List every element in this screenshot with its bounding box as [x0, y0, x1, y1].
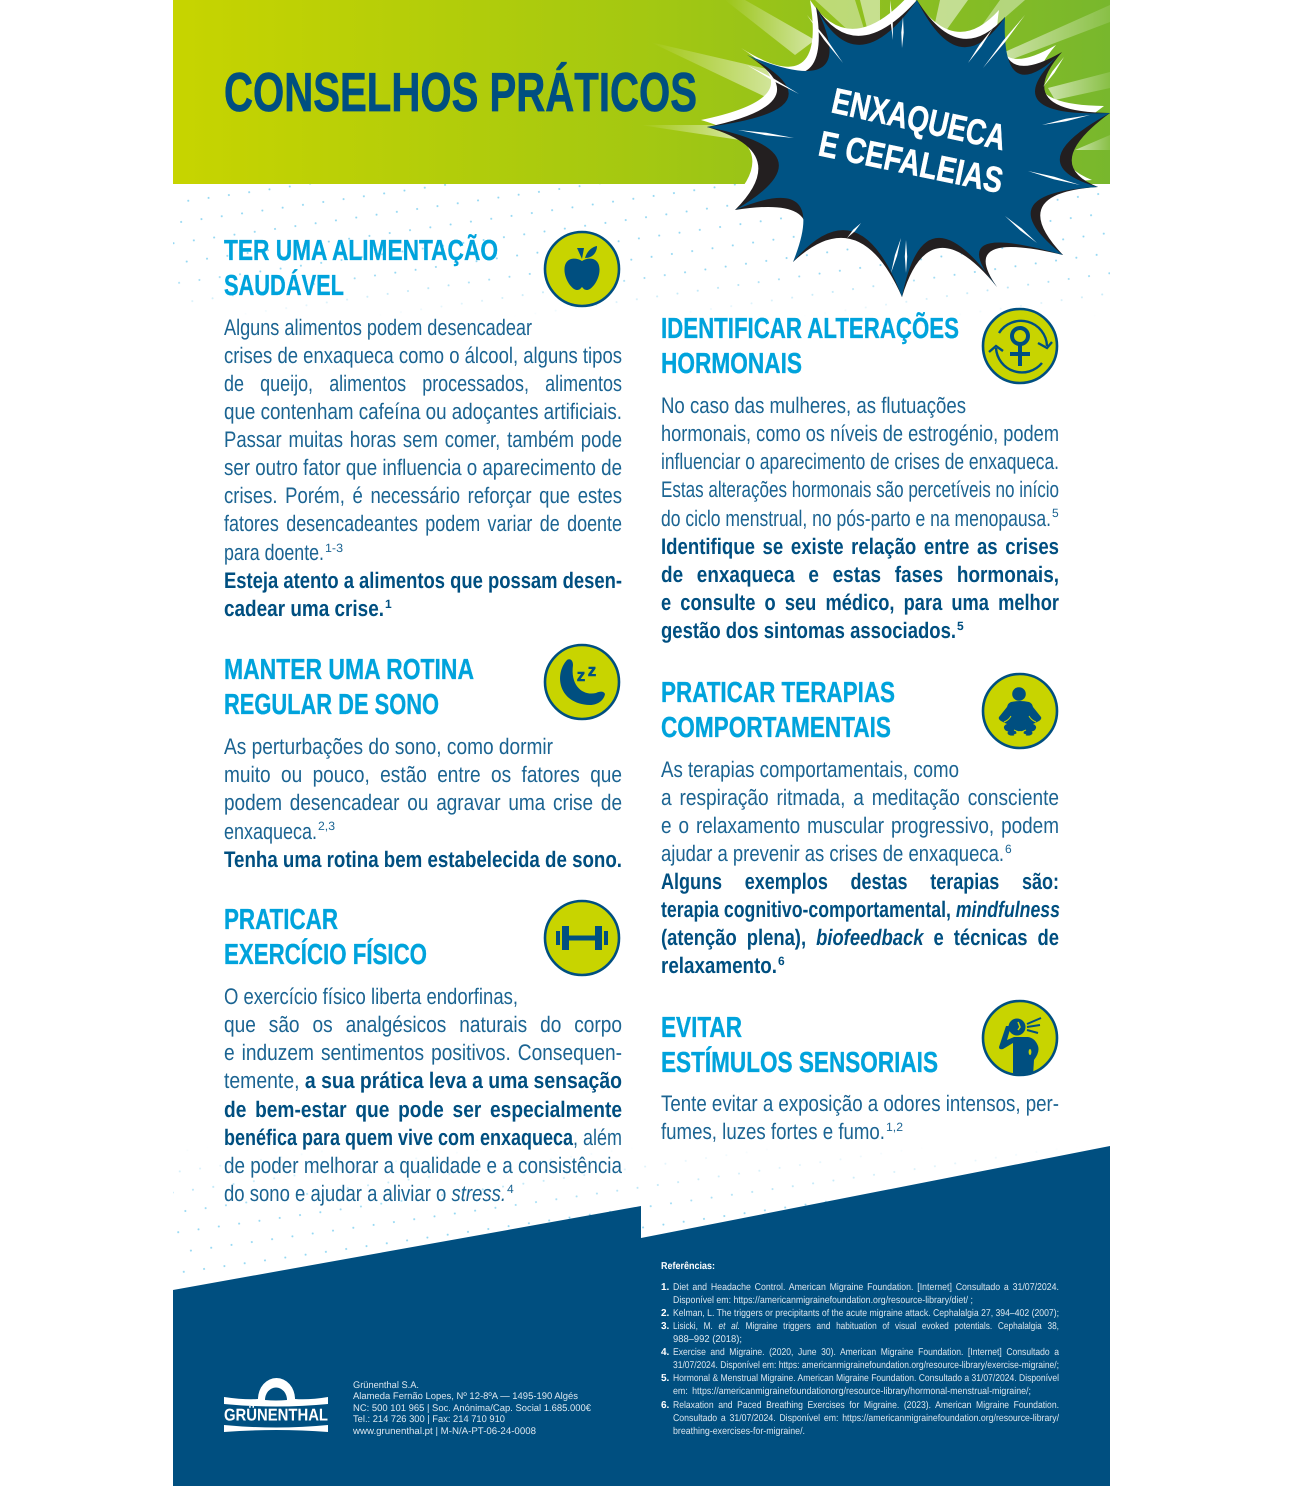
header banner — [173, 0, 1110, 184]
body text: sono: As perturbações do sono, como dormir — [224, 734, 553, 759]
title: CONSELHOS PRÁTICOS — [224, 61, 697, 123]
company address: NC: 500 101 965 | Soc. Anónima/Cap. Social 1.685.000€ — [353, 1403, 592, 1414]
company address: www.grunenthal.pt | M-N/A-PT-06-24-0008 — [352, 1426, 536, 1437]
body text: exercício: que são os analgésicos naturais do corpo — [224, 1012, 622, 1037]
body text: hormonais: hormonais, como os níveis de estrogénio, podem — [661, 421, 1059, 446]
heading: terapias: PRATICAR TERAPIAS — [661, 677, 895, 709]
body text: exercício: temente, a sua prática leva a uma sensação — [224, 1068, 622, 1093]
panel: terapias comportamentais — [661, 674, 1060, 978]
references: Exercise and Migraine. (2020, June 30). American Migraine Foundation. [Internet] Consultado a — [673, 1347, 1059, 1358]
badge text: ENXAQUECA — [828, 80, 1010, 158]
heading: exercício: PRATICAR — [224, 904, 338, 936]
body text: alimentação: ser outro fator que influencia o aparecimento de — [224, 455, 622, 480]
body text: estímulos: fumes, luzes fortes e fumo. — [661, 1119, 885, 1144]
icon: apple — [545, 232, 619, 306]
body text: hormonais: gestão dos sintomas associados. — [661, 618, 956, 643]
heading: terapias — [661, 677, 895, 744]
references: Consultado a 31/07/2024. Disponível em: https://americanmigrainefoundation.org/resource-library/ — [673, 1413, 1059, 1424]
references: 31/07/2024. Disponível em: https: americanmigrainefoundation.org/resource-library/exercise-migraine/; — [673, 1360, 1059, 1371]
company address: Tel.: 214 726 300 | Fax: 214 710 910 — [353, 1414, 505, 1425]
body text: terapias: As terapias comportamentais, como — [661, 757, 959, 782]
heading: estímulos: ESTÍMULOS SENSORIAIS — [661, 1046, 938, 1079]
heading: hormonais: HORMONAIS — [661, 348, 802, 380]
heading: exercício — [224, 904, 427, 971]
references: Disponível em: https://americanmigrainefoundation.org/resource-library/diet/ ; — [673, 1295, 973, 1306]
body text: alimentação: 1-3 — [325, 541, 343, 555]
references: em: https://americanmigrainefoundationorg/resource-library/hormonal-menstrual-migraine/; — [673, 1386, 1031, 1397]
heading: hormonais — [661, 312, 959, 380]
heading: terapias: COMPORTAMENTAIS — [661, 712, 891, 744]
body text: estímulos: Tente evitar a exposição a odores intensos, per- — [661, 1091, 1059, 1116]
body text: hormonais: 5 — [957, 619, 964, 633]
references: Referências: — [661, 1261, 715, 1272]
body text: estímulos: 1,2 — [886, 1120, 903, 1134]
heading: sono: MANTER UMA ROTINA — [224, 654, 474, 686]
icon: meditation — [983, 674, 1057, 748]
badge text — [818, 88, 1002, 192]
body text: terapias: 6 — [778, 954, 785, 968]
body text: hormonais: Identifique se existe relação entre as crises — [661, 534, 1059, 559]
body text: hormonais: 5 — [1052, 506, 1059, 520]
body text: sono: muito ou pouco, estão entre os fatores que — [224, 762, 622, 787]
references — [661, 1261, 1059, 1437]
icon: female symbol with cycle arrows — [983, 309, 1057, 383]
body text: alimentação: de queijo, alimentos processados, alimentos — [224, 371, 622, 396]
references: 988–992 (2018); — [673, 1334, 742, 1345]
panel: rotina de sono — [224, 645, 622, 872]
icon: person with headache — [983, 1001, 1057, 1076]
body text: terapias: Alguns exemplos destas terapias são: — [661, 869, 1059, 894]
icon: moon: z — [588, 661, 596, 680]
heading: exercício: EXERCÍCIO FÍSICO — [224, 938, 427, 971]
references: 3. — [661, 1321, 670, 1332]
references: 2. — [661, 1308, 670, 1319]
body text: alimentação: fatores desencadeantes podem variar de doente — [224, 511, 622, 536]
heading: hormonais: IDENTIFICAR ALTERAÇÕES — [661, 312, 959, 345]
body text: terapias: a respiração ritmada, a meditação consciente — [661, 785, 1059, 810]
panel: exercício físico — [224, 901, 622, 1206]
heading: estímulos: EVITAR — [661, 1012, 742, 1044]
logo: Grünenthal: GRÜNENTHAL — [224, 1406, 328, 1424]
body text: alimentação: para doente. — [224, 540, 324, 565]
body text: alimentação: crises. Porém, é necessário reforçar que estes — [224, 483, 622, 508]
body text: exercício: O exercício físico liberta endorfinas, — [224, 984, 518, 1009]
body text: hormonais: No caso das mulheres, as flutuações — [661, 393, 966, 418]
body text: alimentação: cadear uma crise. — [224, 596, 384, 621]
references: Diet and Headache Control. American Migraine Foundation. [Internet] Consultado a 31/07/2024. — [673, 1282, 1059, 1293]
body text: terapias: relaxamento. — [661, 953, 777, 978]
logo: Grünenthal — [224, 1378, 328, 1432]
heading: estímulos — [661, 1012, 938, 1079]
company address — [352, 1380, 592, 1437]
body text: alimentação: Alguns alimentos podem desencadear — [224, 315, 532, 340]
body text: terapias: e o relaxamento muscular progressivo, podem — [661, 813, 1059, 838]
heading: sono: REGULAR DE SONO — [224, 689, 439, 721]
company address: Grünenthal S.A. — [353, 1380, 419, 1391]
heading: alimentação — [224, 234, 498, 302]
company address: Alameda Fernão Lopes, Nº 12-8ºA — 1495-190 Algés — [353, 1391, 578, 1402]
body text: sono — [224, 734, 622, 872]
body text: exercício — [224, 984, 622, 1206]
heading: sono — [224, 654, 474, 721]
starburst badge — [701, 0, 1110, 297]
body text: terapias: ajudar a prevenir as crises de enxaqueca. — [661, 841, 1004, 866]
references: 4. — [661, 1347, 670, 1358]
references: Relaxation and Paced Breathing Exercises for Migraine. (2023). American Migraine Foundation. — [673, 1400, 1059, 1411]
body text: alimentação: 1 — [385, 597, 392, 611]
heading: alimentação: SAUDÁVEL — [224, 269, 344, 302]
body text: exercício: de poder melhorar a qualidade e a consistência — [224, 1153, 622, 1178]
badge text: E CEFALEIAS — [815, 123, 1007, 201]
body text: sono: 2,3 — [318, 819, 335, 833]
body text: exercício: e induzem sentimentos positivos. Consequen- — [224, 1040, 622, 1065]
footer panel — [173, 1146, 1110, 1486]
body text: terapias: (atenção plena), biofeedback e técnicas de — [661, 925, 1059, 950]
body text: sono: enxaqueca. — [224, 819, 317, 844]
body text: sono: podem desencadear ou agravar uma crise de — [224, 790, 622, 815]
heading: alimentação: TER UMA ALIMENTAÇÃO — [224, 234, 498, 267]
body text: exercício: de bem-estar que pode ser especialmente — [224, 1097, 622, 1122]
icon: moon: z — [577, 666, 585, 685]
references: 5. — [661, 1373, 670, 1384]
body text: hormonais: de enxaqueca e estas fases hormonais, — [661, 562, 1059, 587]
body text: hormonais — [661, 393, 1059, 643]
references: 6. — [661, 1400, 670, 1411]
body text: terapias: terapia cognitivo-comportamental, mindfulness — [661, 897, 1060, 922]
panel: alterações hormonais — [661, 309, 1059, 643]
background dot pattern — [173, 184, 1110, 1290]
body text: hormonais: e consulte o seu médico, para uma melhor — [661, 590, 1059, 615]
body text: alimentação: Passar muitas horas sem comer, também pode — [224, 427, 622, 452]
body text: terapias — [661, 757, 1060, 978]
body text: sono: Tenha uma rotina bem estabelecida de sono. — [224, 847, 622, 872]
body text: exercício: do sono e ajudar a aliviar o stress. — [224, 1181, 506, 1206]
body text: alimentação — [224, 315, 622, 621]
references: Lisicki, M. et al. Migraine triggers and habituation of visual evoked potentials. Cephalalgia 38, — [673, 1321, 1059, 1332]
body text: hormonais: Estas alterações hormonais são percetíveis no início — [661, 477, 1059, 502]
references: 1. — [661, 1282, 670, 1293]
icon: moon — [545, 645, 619, 719]
panel: alimentação saudável — [224, 232, 622, 621]
body text: exercício: 4 — [507, 1182, 514, 1196]
body text: alimentação: que contenham cafeína ou adoçantes artificiais. — [224, 399, 622, 424]
panel: estímulos sensoriais — [661, 1001, 1059, 1144]
body text: terapias: 6 — [1005, 842, 1012, 856]
body text: hormonais: influenciar o aparecimento de crises de enxaqueca. — [661, 449, 1059, 474]
body text: hormonais: do ciclo menstrual, no pós-parto e na menopausa. — [661, 506, 1051, 531]
references: Hormonal & Menstrual Migraine. American Migraine Foundation. Consultado a 31/07/2024. Disponível — [673, 1373, 1059, 1384]
body text: alimentação: Esteja atento a alimentos que possam desen- — [224, 568, 622, 593]
body text: estímulos — [661, 1091, 1059, 1144]
references: Kelman, L. The triggers or precipitants of the acute migraine attack. Cephalalgia 27, 394–402 (2007); — [673, 1308, 1059, 1319]
body text: alimentação: crises de enxaqueca como o álcool, alguns tipos — [224, 343, 622, 368]
body text: exercício: benéfica para quem vive com enxaqueca, além — [224, 1125, 622, 1150]
references: breathing-exercises-for-migraine/. — [673, 1426, 805, 1437]
icon: dumbbell — [545, 901, 619, 975]
